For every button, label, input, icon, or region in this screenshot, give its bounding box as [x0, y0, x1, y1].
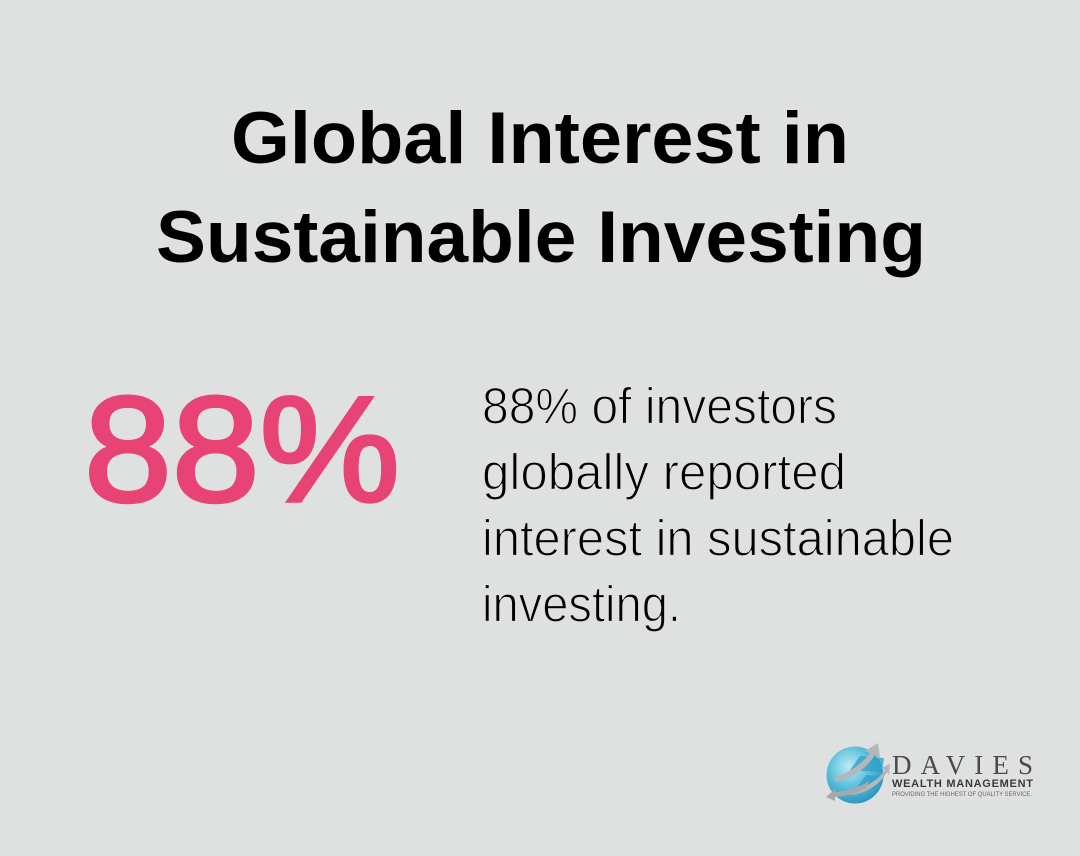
description text: interest in sustainable: [482, 510, 954, 566]
icon: globe with arrows: [826, 743, 890, 804]
description text: globally reported: [482, 444, 846, 500]
description text: investing.: [482, 576, 681, 632]
big statistic: 88%: 88%: [84, 365, 400, 533]
wordmark: Davies: DAVIES: [892, 750, 1033, 780]
logo: Davies Wealth Management: [826, 743, 1033, 804]
description text: 88% of investors: [482, 378, 837, 434]
title: [156, 98, 926, 278]
title: Sustainable Investing: [156, 197, 926, 278]
title: Global Interest in: [231, 98, 849, 179]
wordmark: Wealth Management: WEALTH MANAGEMENT: [892, 778, 1033, 790]
tagline: PROVIDING THE HIGHEST OF QUALITY SERVICE.: [892, 791, 1032, 798]
description text: [482, 378, 954, 632]
